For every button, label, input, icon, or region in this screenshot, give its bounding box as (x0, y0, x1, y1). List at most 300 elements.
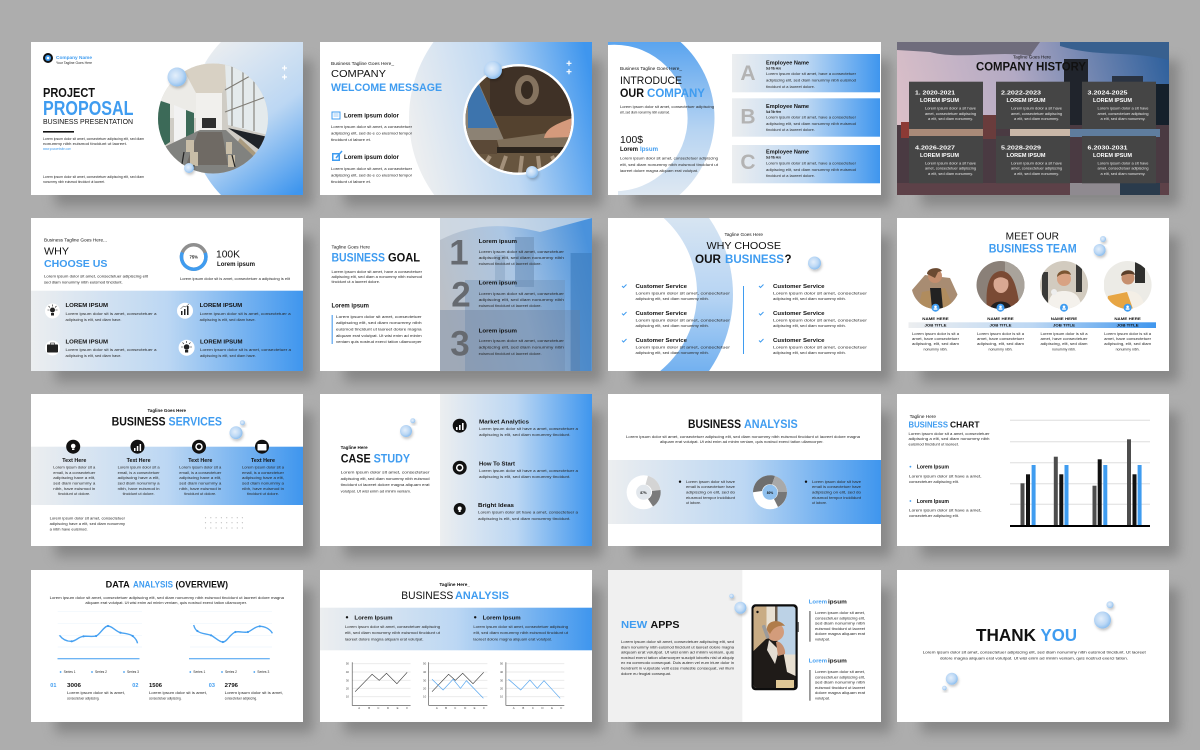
member 2: Lorem ipsum dolor is sit a (977, 332, 1024, 336)
line chart B: F (483, 706, 485, 710)
heading: BUSINESS TEAM (989, 242, 1077, 256)
item 2: consectetuer adipiscing elit. (909, 514, 959, 518)
stat 01: Lorem ipsum dolor sit is amet, (67, 691, 125, 695)
heading: SERVICES (168, 416, 222, 428)
intro text: tincidunt ut laoreet dolore magna aliquam erat (341, 483, 430, 487)
legend 1: Series 1 (64, 670, 76, 674)
card 5: a elit, sed diam nonummy. (1014, 172, 1059, 176)
panel: business analysis line charts (320, 570, 592, 722)
row B: B (740, 106, 756, 128)
photo: conference room (158, 63, 268, 174)
row A: Employee Name (766, 60, 809, 66)
divider bar (43, 131, 74, 133)
icon: chart (130, 440, 144, 454)
heading: Tagline Here (341, 445, 368, 450)
intro text (50, 596, 284, 605)
card 2 (996, 82, 1070, 129)
bubble small (1106, 601, 1114, 608)
panel: business analysis donuts (608, 394, 881, 546)
stat 02: 02 (132, 683, 138, 689)
item 4: adipiscing is elit, sed diam have. (200, 354, 256, 358)
intro text: Lorem ipsum dolor sit a amet, consectetuer (908, 432, 990, 436)
title (976, 625, 1077, 645)
heading (44, 238, 108, 270)
row A: A (740, 62, 756, 85)
service right 3: Lorem ipsum dolor sit amet, consectetuer (773, 346, 868, 350)
heading: Tagline Goes Here (332, 244, 371, 250)
member 4: NAME HERE (1114, 316, 1141, 321)
item 2 (200, 303, 291, 322)
line chart B: C (454, 706, 456, 710)
item 2: adipiscing elit, sed diam nonummy nibh (479, 298, 564, 302)
service left 1: Lorem ipsum dolor sit amet, consectetuer (636, 292, 731, 296)
gradient side (440, 394, 592, 546)
intro text (620, 105, 714, 114)
text block 1: email is consectetuer have (686, 485, 735, 489)
heading: DATA (106, 580, 130, 590)
member 3: JOB TITLE (1053, 323, 1075, 328)
member 4: JOB TITLE (1117, 323, 1139, 328)
text block 2: Lorem ipsum dolor sit have (812, 480, 861, 484)
stat 02: 1506 (149, 683, 162, 689)
item 1: Market Analytics (479, 420, 529, 426)
line chart B: 20 (423, 686, 427, 690)
service 1: email, is a consectetuer (53, 471, 96, 475)
line chart 1 (58, 612, 142, 659)
service right 2 (759, 311, 868, 328)
card 4: Lorem ipsum dolor a sit have (925, 162, 976, 166)
icon: briefcase (255, 440, 269, 454)
legend 2: Series 2 (225, 670, 237, 674)
block 2: ipsum (828, 658, 847, 664)
heading (908, 414, 980, 430)
item 1: euismod tincidunt ut laoreet dolore. (479, 262, 542, 266)
heading: ANALYSIS (455, 590, 509, 602)
item 1: consectetuer adipiscing elit. (909, 480, 959, 484)
line chart B: 50 (423, 662, 427, 666)
item 1: Lorem ipsum dolor sit have a amet, (909, 474, 982, 478)
bubble (734, 602, 746, 614)
card 3: 3.2024-2025 (1088, 90, 1128, 96)
intro text: sed diam nonummy nibh euismod tincidunt. (44, 280, 123, 284)
block left: elit, sed diam nonummy nibh euismod tincidunt ut (345, 631, 440, 635)
heading: (OVERVIEW) (176, 580, 228, 590)
service left 2: Lorem ipsum dolor sit amet, consectetuer (636, 318, 731, 322)
card 4: LOREM IPSUM (920, 153, 959, 159)
member 2: amet, have consectetuer (977, 337, 1025, 341)
item 3: Bright Ideas (478, 503, 514, 509)
row B: adipiscing elit, sed diam nonummy nibh euismod (766, 122, 856, 126)
block 2: Lorem ipsum dolor sit amet, (815, 670, 865, 674)
card 2: 2.2022-2023 (1001, 90, 1041, 96)
card 6: a elit, sed diam nonummy. (1100, 172, 1146, 176)
legend 2: Series 1 (193, 670, 205, 674)
block 1: sed diam nonummy nibh (815, 622, 865, 626)
text block 2: email is consectetuer have (812, 485, 861, 489)
line chart C: A (513, 706, 515, 710)
panel: data analysis overview (31, 570, 303, 722)
body text: aliquam erat volutpat. Ut wisi enim ad minim veniam, quis (621, 650, 734, 654)
service 2 (118, 458, 160, 496)
item 3: adipiscing is elit, sed diam have. (66, 354, 122, 358)
body text: aliquam erat volutpat. Ut wisi enim ad minim (336, 334, 422, 338)
footer text: adipiscing have a elit, sed diam nonummy (50, 522, 125, 526)
item one: Lorem ipsum dolor sit amet, a consectetuer (331, 125, 413, 129)
line chart C: C (532, 706, 534, 710)
heading (688, 419, 798, 431)
card 4 (909, 136, 983, 183)
stat 03 (209, 683, 283, 700)
heading: BUSINESS (401, 590, 453, 602)
user badge 1 (932, 304, 940, 312)
item 3 (478, 503, 578, 521)
service right 2: Lorem ipsum dolor sit amet, consectetuer (773, 318, 868, 322)
service 3: Lorem ipsum dolor sit a (179, 466, 221, 470)
band (31, 291, 303, 371)
item 2: How To Start (479, 462, 515, 468)
body text: Lorem ipsum dolor sit amet, consectetuer (336, 315, 423, 319)
item 1 (909, 464, 982, 484)
service 3 (179, 458, 222, 496)
footer text (50, 516, 126, 532)
service right 2: Customer Service (773, 311, 825, 317)
item two (331, 155, 413, 184)
item 1: Lorem Ipsum (917, 464, 949, 470)
member 1: JOB TITLE (924, 323, 947, 328)
stat: 100K: Lorem ipsum dolor sit is amet, consectetuer a adipiscing is elit (180, 277, 290, 281)
service 1: Text Here (62, 458, 87, 464)
bubble (168, 68, 186, 86)
intro text: aliquam erat volutpat. Ut wisi enim ad minim veniam, quis nostrud exerci tation ullamcorper. (85, 601, 247, 605)
row A: Lorem ipsum dolor sit amet, have a consectetuer (766, 72, 857, 76)
line chart A: D (387, 706, 389, 710)
card 6 (1082, 136, 1156, 183)
service 4: Lorem ipsum dolor sit a (242, 466, 284, 470)
stat 01: 01 (50, 683, 56, 689)
member 1: adipiscing, elit, sed diam (912, 342, 959, 346)
card 1: a elit, sed diam nonummy. (928, 117, 973, 121)
panel: business services (31, 394, 303, 546)
card 3 (1082, 82, 1156, 129)
card 5: LOREM IPSUM (1006, 153, 1046, 159)
line chart C: E (551, 706, 553, 710)
line chart C: 40 (500, 670, 503, 674)
title: THANK (976, 625, 1036, 645)
line chart B: A (436, 706, 438, 710)
intro text (341, 470, 431, 494)
user badge 2 (996, 304, 1004, 312)
stat 02 (132, 683, 207, 700)
row B: Employee Name (766, 104, 809, 110)
phone (752, 604, 799, 690)
item 2: adipiscing is elit, sed diam nonummy tincidunt. (479, 475, 570, 479)
row C: Sub Title Here (766, 156, 781, 160)
divider (743, 286, 744, 354)
bubble small (184, 163, 194, 173)
member 3: NAME HERE (1051, 316, 1078, 321)
icon: bulb (66, 440, 80, 454)
service 2: nibh, have euismod in (118, 487, 160, 491)
block left (345, 616, 440, 642)
row C: Lorem ipsum dolor sit amet, have a consectetuer (766, 162, 857, 166)
line chart C: 30 (500, 678, 503, 682)
row B: Lorem ipsum dolor sit amet, have a consectetuer (766, 116, 857, 120)
stat label: Ipsum (640, 147, 658, 153)
item two: adipiscing elit, sed do e co eiusmod tempor (331, 174, 413, 178)
heading: Business Tagline Goes Here_ (620, 66, 683, 71)
body text: hendrerit in vulputate velit esse molestie consequat, vel illum (621, 666, 734, 670)
item 3 (479, 328, 565, 356)
title: YOU (1040, 625, 1077, 645)
heading: Tagline Goes Here (148, 408, 187, 413)
item 3 (66, 340, 156, 358)
item 1: adipiscing elit, sed diam nonummy nibh (479, 256, 564, 260)
service 3: sed diam nonummy a (179, 482, 221, 486)
legend 1: Series 2 (95, 670, 107, 674)
item 2: Lorem ipsum (479, 280, 517, 286)
member 4: adipiscing, elit, sed diam (1104, 342, 1151, 346)
line chart A: F (406, 706, 408, 710)
intro text: aliquam erat volutpat. Ut wisi enim ad minim veniam, quis nostrud exerci tation ullamcorper. (660, 440, 824, 444)
service right 3 (759, 338, 868, 355)
service 1: Lorem ipsum dolor sit a (53, 466, 95, 470)
body text: dolore magna aliquam erat volutpat. Ut wisi enim ad minim veniam, quis nostrud exerci tation. (940, 656, 1128, 660)
logo (43, 53, 53, 63)
service 4: nibh, have euismod in (242, 487, 284, 491)
service 2: tincidunt ut dolore. (123, 492, 155, 496)
member 2: JOB TITLE (990, 323, 1012, 328)
block 2: dolore magna aliquam erat (815, 691, 865, 695)
stat 01: 3006 (67, 683, 81, 689)
item 2: Lorem ipsum dolor sit have a amet, consectetuer a (479, 469, 578, 473)
panel: why choose our business (608, 218, 881, 371)
card 4: 4.2026-2027 (915, 145, 955, 151)
item 3: Lorem ipsum dolor sit amet, consectetuer (479, 339, 565, 343)
item two: Lorem ipsum dolor sit amet, a consectetuer (331, 167, 413, 171)
text block 1: Lorem ipsum dolor sit have (686, 480, 735, 484)
line chart A: 20 (346, 686, 349, 690)
line chart A: 50 (346, 662, 349, 666)
intro text: Lorem ipsum dolor sit amet, consectetuer adipiscing elit, sed diam nonummy nibh euismod tincidunt ut laoreet dolore magna (626, 435, 860, 439)
card 1: 1. 2020-2021 (915, 90, 955, 96)
line chart A: B (368, 706, 370, 710)
block 2: Lorem (809, 658, 827, 664)
item 1 (479, 239, 565, 266)
block 2: euismod tincidunt ut laoreet (815, 686, 865, 690)
heading (331, 61, 442, 94)
block left: laoreet dolore magna aliquam erat volutpat. (345, 638, 424, 642)
line chart 2 (189, 612, 272, 659)
stat text (620, 156, 718, 173)
heading (106, 580, 228, 590)
heading: Business Tagline Goes Here_ (331, 61, 395, 66)
subheading: Lorem ipsum (332, 304, 369, 310)
block right (473, 616, 568, 642)
block 1: euismod tincidunt ut laoreet (815, 627, 865, 631)
heading: OUR (620, 88, 645, 100)
footer text: Lorem ipsum dolor sit amet, consectetuer (50, 516, 126, 520)
body text: www.yourwebsite.com (43, 147, 71, 151)
text block 1 (679, 480, 735, 505)
intro text: Lorem ipsum dolor sit amet, have a consectetuer (332, 270, 423, 274)
intro text: elit, sed diam nonummy nibh euismod. (620, 110, 670, 114)
service 2: Lorem ipsum dolor sit a (118, 466, 160, 470)
item 4: LOREM IPSUM (200, 340, 243, 346)
line chart A: A (358, 706, 360, 710)
body text (43, 137, 144, 151)
member 1: NAME HERE (922, 316, 949, 321)
heading (620, 66, 705, 100)
block right: Lorem ipsum dolor sit amet, consectetuer adipiscing (473, 625, 568, 629)
footer text: Lorem ipsum dolor sit amet, consectetuer adipiscing elit, sed diam (43, 175, 144, 179)
item 1 (479, 420, 578, 437)
heading: BUSINESS (725, 254, 784, 266)
service 4: tincidunt ut dolore. (247, 492, 279, 496)
heading: BUSINESS (332, 250, 385, 264)
line chart A: E (397, 706, 399, 710)
line chart A: 30 (346, 678, 349, 682)
item 2: Lorem Ipsum (917, 499, 949, 505)
text block 1: ut labore. (686, 501, 701, 505)
body text: euismod tincidunt ut laoreet dolore magna (336, 328, 422, 332)
service left 3: Lorem ipsum dolor sit amet, consectetuer (636, 346, 731, 350)
service right 1: Lorem ipsum dolor sit amet, consectetuer (773, 292, 868, 296)
bubble (484, 61, 502, 79)
icon: briefcase (45, 340, 60, 356)
heading: CHART (950, 420, 980, 430)
intro text: tincidunt ut a laoreet dolore. (332, 280, 380, 284)
icon: chart (177, 303, 193, 319)
block 2 (809, 658, 865, 701)
intro text: Lorem ipsum dolor sit amet, consectetuer (341, 470, 431, 474)
card 3: amet, consectetuer adipiscing (1098, 112, 1148, 116)
photo: man on phone (754, 606, 796, 688)
heading: Tagline Here_ (439, 582, 471, 587)
number 3: 3 (450, 324, 470, 364)
dot pattern (205, 517, 243, 529)
plus icons (566, 61, 572, 74)
row C: adipiscing elit, sed diam nonummy nibh euismod (766, 168, 856, 172)
stat 01: consectetuer adipiscing. (67, 696, 99, 700)
heading: MEET OUR (1006, 232, 1059, 242)
item 2: adipiscing is elit, sed diam have. (200, 318, 256, 322)
heading (401, 582, 509, 602)
block 2: consectetuer adipiscing elit, (815, 676, 865, 680)
icon: gear (453, 461, 467, 475)
panel: business team (897, 218, 1169, 371)
service 4: adipiscing have a elit, (242, 476, 284, 480)
line chart C: 50 (500, 662, 503, 666)
heading: COMPANY (647, 88, 705, 100)
bubble (1094, 612, 1111, 628)
line chart B: 40 (423, 670, 427, 674)
stat text: laoreet dolore magna aliquam erat volutpat. (620, 169, 698, 173)
title: BUSINESS PRESENTATION (43, 117, 133, 126)
heading: Tagline Goes Here (724, 232, 764, 237)
footer text (43, 175, 144, 184)
icon: bulb (454, 503, 466, 515)
bubble small (526, 166, 538, 178)
intro text: euismod tincidunt ut laoreet. (908, 442, 959, 446)
intro text (44, 274, 148, 284)
heading (695, 232, 792, 266)
heading: ANALYSIS (744, 419, 798, 431)
service left 2: Customer Service (636, 311, 687, 317)
photo: laptop (463, 64, 574, 175)
bubble small (240, 420, 245, 425)
body text: nonummy nibh euismod tincidunt ut laoreet. (43, 142, 127, 146)
portrait 4 (1104, 261, 1152, 309)
line chart C: F (560, 706, 562, 710)
stat 02: Lorem ipsum dolor sit is amet, (149, 691, 207, 695)
member 2: nonummy nibh. (988, 348, 1012, 352)
bubble small (410, 418, 415, 423)
card 6: 6.2030-2031 (1088, 145, 1128, 151)
bubble lower small (942, 686, 947, 690)
portrait 2 (976, 261, 1025, 309)
band (320, 608, 592, 650)
service 3: nibh, have euismod in (179, 487, 221, 491)
service left 2: adipiscing elit, sed diam nonummy nibh. (636, 324, 709, 328)
line chart B: E (474, 706, 476, 710)
service left 2 (622, 311, 731, 328)
band (608, 460, 881, 524)
service left 3 (622, 338, 731, 355)
service right 1: adipiscing elit, sed diam nonummy nibh. (773, 297, 846, 301)
legend 1 (60, 670, 139, 674)
job title band (908, 322, 1156, 328)
heading: BUSINESS (688, 419, 741, 431)
block right: Lorem Ipsum (483, 616, 521, 622)
card 1: amet, consectetuer adipiscing (925, 112, 976, 116)
heading (621, 620, 680, 631)
bar chart (1010, 420, 1150, 527)
body text (621, 640, 734, 676)
row C: C (740, 151, 756, 174)
user badge 4 (1124, 304, 1132, 312)
item 1: Lorem ipsum dolor sit have a amet, consectetuer a (479, 427, 578, 431)
heading: OUR (695, 254, 722, 266)
service right 1: Customer Service (773, 284, 825, 290)
member 1: nonummy nibh. (924, 348, 948, 352)
service 1 (53, 458, 96, 496)
item one: adipiscing elit, sed do e co eiusmod tempor (331, 132, 413, 136)
heading: WELCOME MESSAGE (331, 82, 442, 94)
block 1 (809, 600, 865, 642)
company name: Company Name (56, 55, 93, 60)
service right 3: Customer Service (773, 338, 825, 344)
row B: tincidunt ut a laoreet dolore. (766, 128, 815, 132)
number 1: 1 (449, 234, 469, 272)
heading: APPS (650, 620, 680, 631)
title: PROJECT (43, 85, 95, 100)
title: PROPOSAL (43, 98, 134, 120)
block left: Lorem Ipsum (354, 616, 392, 622)
card 1 (909, 82, 983, 129)
block 1: volutpat. (815, 638, 830, 642)
card 6: LOREM IPSUM (1093, 153, 1132, 159)
stat: 100K: 100K (216, 250, 240, 260)
member 4: amet, have consectetuer (1104, 337, 1152, 341)
block 1: Lorem ipsum dolor sit amet, (815, 611, 865, 615)
service right 3: adipiscing elit, sed diam nonummy nibh. (773, 351, 846, 355)
service 4: email, is a consectetuer (242, 471, 285, 475)
heading: COMPANY HISTORY (976, 60, 1086, 74)
heading (341, 445, 410, 466)
service 1: sed diam nonummy a (53, 482, 95, 486)
stat: 100K: Lorem ipsum (217, 262, 255, 268)
service left 3: Customer Service (636, 338, 687, 344)
